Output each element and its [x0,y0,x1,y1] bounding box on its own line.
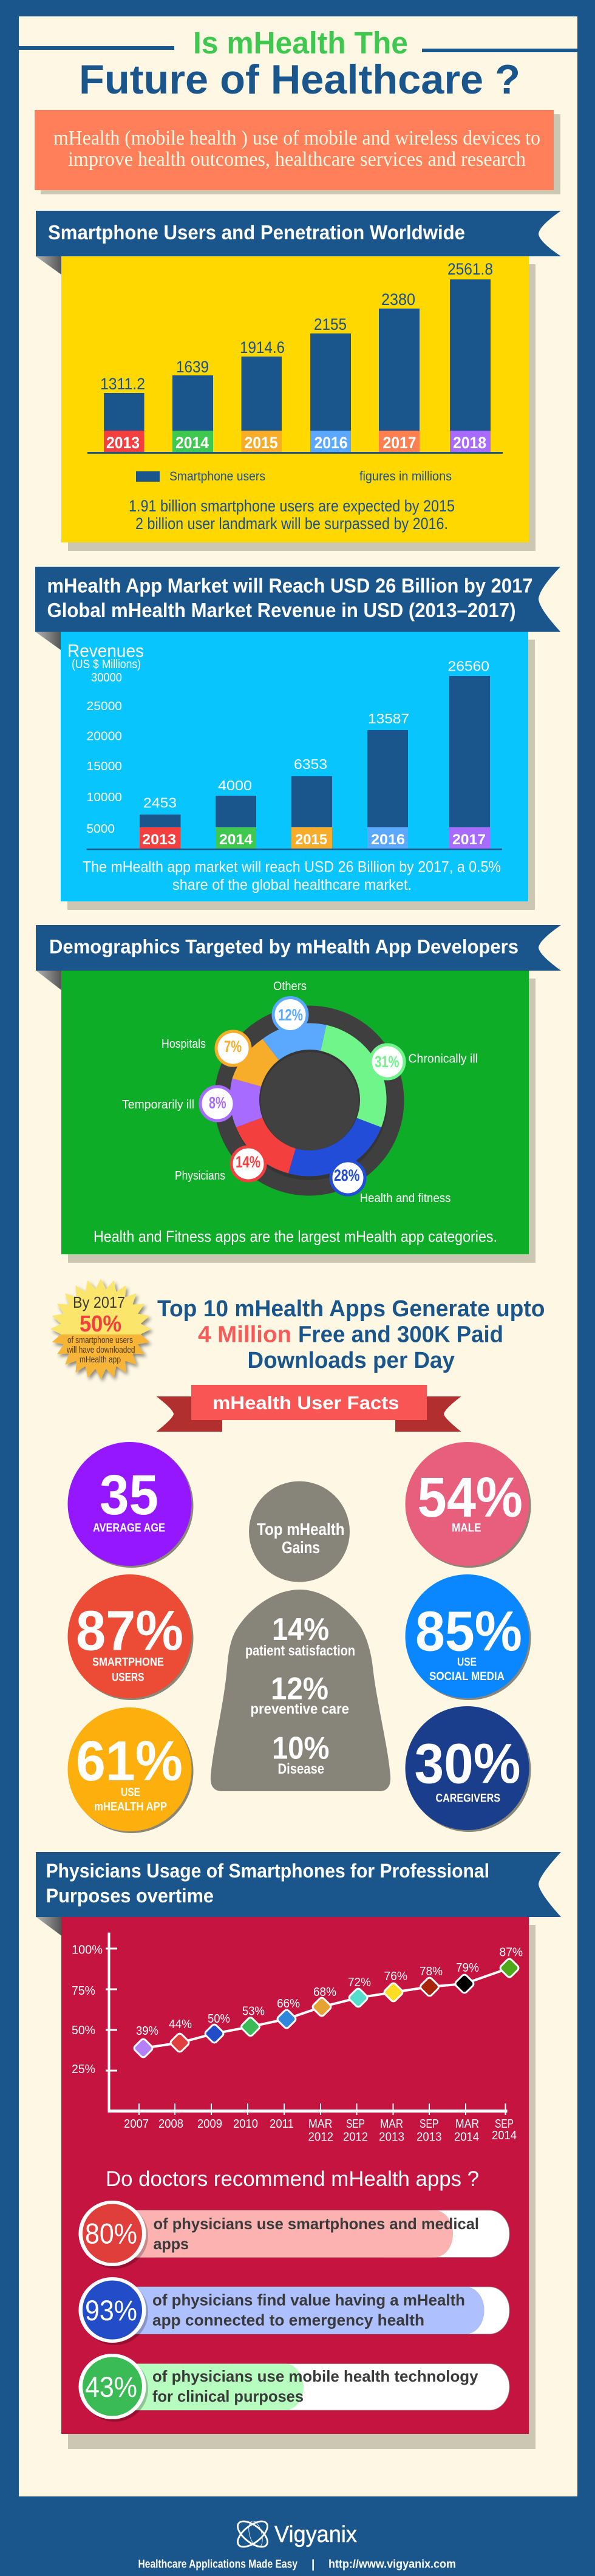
x axis labels: 2009 [197,2117,222,2131]
badge: temporarily ill [122,1087,234,1121]
bar chart: smartphone users: 2018 [453,434,486,452]
data labels: 78% [420,1965,443,1978]
chart axes [72,1933,508,2115]
y axis title: (US $ Millions) [72,658,141,671]
bar chart: revenue: 13587 [368,711,409,726]
panel: app market revenue [35,567,560,910]
tagline [138,2558,456,2571]
heading: do doctors recommend: Do doctors recommend mHealth apps ? [106,2167,479,2191]
badge: health and fitness: 28% [334,1166,359,1184]
banner: smartphone users heading: Smartphone Users and Penetration Worldwide [48,221,465,244]
badge: chronically ill: Chronically ill [408,1052,478,1065]
stat: male [406,1442,531,1568]
stat: mhealth app: USE [121,1786,140,1799]
starburst badge: By 2017 [73,1293,125,1311]
progress row: 80% [79,2201,509,2269]
badge: chronically ill: 31% [375,1053,399,1071]
intro callout: improve health outcomes, healthcare services and research [68,148,526,171]
badge: temporarily ill: 8% [209,1093,226,1112]
stat: caregivers: CAREGIVERS [436,1792,500,1805]
stat: male: 54% [418,1466,523,1529]
x axis labels: 2012 [343,2131,368,2144]
banner: demographics heading: Demographics Targeted by mHealth App Developers [49,935,518,957]
y axis labels: 20000 [86,730,122,743]
headline: top 10 apps: Top 10 mHealth Apps Generate upto [157,1296,545,1322]
bar chart: smartphone users: 1311.2 [100,375,145,393]
stat: smartphone users: SMARTPHONE [92,1656,164,1669]
x axis labels [124,2117,517,2144]
bar chart: smartphone users: 1639 [176,358,209,376]
data labels [136,1946,523,2038]
data labels: 68% [313,1986,336,1999]
badge: health and fitness: Health and fitness [359,1192,450,1205]
badge: hospitals: Hospitals [162,1037,206,1051]
starburst badge [50,1279,151,1379]
caption [129,497,455,533]
person figure: top mhealth gains: 14% [272,1612,329,1647]
badge: health and fitness [331,1161,450,1205]
progress row: 80%: of physicians use smartphones and medical [153,2215,479,2233]
x axis labels: 2007 [124,2117,149,2131]
ribbon: user facts: mHealth User Facts [212,1392,399,1413]
icon: vigyanix logo [234,2516,271,2552]
bar chart: smartphone users: 2016 [314,434,347,452]
bar chart: smartphone users [87,260,503,454]
person figure: top mhealth gains: Gains [282,1538,320,1557]
progress row: 80%: 80% [85,2218,137,2250]
donut chart [122,980,478,1205]
banner: app market heading: mHealth App Market will Reach USD 26 Billion by 2017 [47,575,533,596]
x axis labels: 2008 [158,2117,183,2131]
data labels: 53% [242,2005,265,2018]
bar chart: revenue: 26560 [448,658,489,674]
badge: hospitals: 7% [224,1037,242,1056]
progress row: 93%: app connected to emergency health [152,2311,424,2329]
title line 1: Is mHealth The [193,26,408,60]
x axis labels: MAR [380,2117,403,2131]
bar chart: smartphone users: 2015 [244,434,278,452]
headline: top 10 apps: Free and 300K Paid [298,1322,503,1347]
progress row: 43%: of physicians use mobile health technology [152,2367,478,2385]
stat: social media [406,1574,531,1700]
caption: share of the global healthcare market. [172,876,412,893]
tagline: Healthcare Applications Made Easy [138,2558,298,2571]
y axis title: Revenues [67,641,144,661]
y axis labels: 5000 [86,822,115,836]
data labels: 50% [208,2012,230,2026]
y axis labels: 10000 [86,791,122,804]
progress row: 43%: 43% [85,2371,137,2403]
line chart [72,1933,523,2144]
brand name: Vigyanix [274,2522,357,2547]
y axis labels: 25000 [86,700,122,713]
badge: hospitals [162,1031,250,1065]
bar chart: revenue [86,658,502,850]
x axis labels: SEP [495,2117,514,2131]
caption: Health and Fitness apps are the largest mHealth app categories. [93,1227,497,1245]
banner: app market heading [35,567,560,632]
person figure: top mhealth gains: Top mHealth [257,1520,345,1539]
progress row: 93% [79,2277,509,2345]
stat: mhealth app: 61% [76,1729,183,1792]
starburst badge: will have downloaded [66,1345,135,1355]
legend [136,470,452,483]
person figure: top mhealth gains: preventive care [250,1701,349,1718]
x axis labels: 2014 [492,2129,517,2142]
title block [19,26,577,103]
x axis labels: 2013 [379,2131,404,2144]
progress row: 43% [79,2354,509,2422]
starburst badge: 50% [80,1311,121,1337]
y axis title [67,641,144,671]
x axis labels: 2012 [308,2131,333,2144]
x axis labels: SEP [420,2117,438,2131]
data labels: 39% [136,2024,158,2038]
stat: average age: AVERAGE AGE [93,1522,165,1535]
progress row: 43%: for clinical purposes [152,2387,304,2405]
x axis labels: 2011 [270,2117,294,2131]
x axis labels: MAR [455,2117,479,2131]
person figure: top mhealth gains: patient satisfaction [245,1643,355,1659]
bar chart: revenue: 2017 [452,832,486,848]
stat: caregivers [406,1706,531,1832]
bar chart: smartphone users: 2561.8 [447,260,493,278]
banner: physicians heading [36,1852,561,1917]
badge: others [273,980,307,1031]
data labels: 87% [499,1946,523,1959]
stat: smartphone users: 87% [76,1599,183,1662]
intro callout: mHealth (mobile health ) use of mobile and wireless devices to [53,127,540,149]
bar chart: smartphone users: 2017 [382,434,416,452]
chart axes: 100% [72,1944,103,1957]
badge: others: Others [273,980,307,993]
bar chart: revenue: 2014 [219,832,253,848]
legend: Smartphone users [169,470,265,483]
data labels: 72% [348,1976,371,1989]
badge: physicians: Physicians [175,1169,225,1183]
x axis labels: 2014 [454,2131,479,2144]
banner: physicians heading: Physicians Usage of Smartphones for Professional [46,1860,489,1882]
caption: 1.91 billion smartphone users are expected by 2015 [129,497,455,515]
panel: demographics [36,925,561,1263]
banner: app market heading: Global mHealth Market Revenue in USD (2013–2017) [47,599,516,621]
stat: mhealth app: mHEALTH APP [94,1801,167,1814]
x axis labels: MAR [308,2117,333,2131]
x axis labels: 2010 [233,2117,258,2131]
ribbon: user facts [157,1385,461,1432]
badge: physicians: 14% [236,1153,260,1171]
data labels: 76% [384,1970,407,1983]
bar chart: smartphone users: 2013 [106,434,140,452]
stat: mhealth app [68,1707,193,1833]
progress row: 93%: of physicians find value having a mHealth [152,2291,465,2309]
y axis labels: 30000 [91,671,122,685]
bar chart: smartphone users: 1914.6 [240,338,285,357]
person figure: top mhealth gains: Disease [278,1761,324,1777]
stat: social media: 85% [415,1600,522,1663]
data markers [133,1958,520,2058]
bar chart: revenue: 2015 [295,832,327,848]
headline: top 10 apps [157,1296,545,1373]
trend line [143,1968,509,2048]
person figure: top mhealth gains: 12% [271,1672,328,1707]
person figure: top mhealth gains: 10% [272,1731,329,1766]
banner: demographics heading [36,925,561,971]
banner: physicians heading: Purposes overtime [46,1885,214,1907]
chart axes: 75% [72,1984,95,1998]
y axis labels: 15000 [86,760,122,773]
caption [83,859,501,893]
badge: chronically ill [370,1045,478,1079]
data labels: 66% [277,1997,300,2011]
person figure: top mhealth gains [211,1481,390,1791]
chart axes: 25% [72,2063,95,2076]
stat: smartphone users: USERS [112,1672,144,1684]
starburst badge: of smartphone users [67,1335,133,1345]
stat: average age [68,1442,193,1568]
bar chart: smartphone users: 2014 [175,434,209,452]
title line 2: Future of Healthcare ? [79,56,520,103]
banner: smartphone users heading [36,211,561,256]
stat: average age: 35 [100,1463,158,1526]
panel: physicians usage [36,1852,561,2449]
stat: social media: USE [457,1656,477,1669]
data labels: 79% [456,1961,479,1975]
progress row: 93%: 93% [85,2294,137,2326]
badge: physicians [175,1147,265,1183]
headline: top 10 apps: 4 Million [198,1322,291,1347]
headline: top 10 apps: Downloads per Day [248,1348,455,1373]
starburst badge: mHealth app [80,1355,121,1365]
stat: caregivers: 30% [414,1732,521,1795]
bar chart: revenue: 4000 [218,777,252,793]
stat: male: MALE [452,1522,481,1535]
bar chart: revenue: 2453 [143,794,177,810]
footer [138,2516,456,2571]
x axis labels: SEP [346,2117,365,2131]
stat: smartphone users [68,1574,193,1700]
caption: 2 billion user landmark will be surpassed by 2016. [135,514,448,533]
chart axes: 50% [72,2024,95,2037]
bar chart: smartphone users: 2155 [314,315,347,333]
tagline: http://www.vigyanix.com [328,2558,456,2571]
tagline: | [311,2558,314,2571]
bar chart: revenue: 2013 [142,832,176,848]
x axis labels: 2013 [416,2131,442,2144]
badge: temporarily ill: Temporarily ill [122,1098,194,1112]
bar chart: revenue: 2016 [371,832,405,848]
progress row: 80%: apps [153,2235,189,2253]
legend: figures in millions [359,470,452,483]
y axis labels [86,671,122,836]
intro callout [35,110,560,194]
bar chart: smartphone users: 2380 [381,290,415,309]
panel: smartphone users [36,211,561,551]
data labels: 44% [169,2018,192,2031]
bar chart: revenue: 6353 [294,756,327,772]
stat: social media: SOCIAL MEDIA [429,1670,505,1683]
badge: others: 12% [278,1006,303,1024]
caption: The mHealth app market will reach USD 26 Billion by 2017, a 0.5% [83,859,501,876]
